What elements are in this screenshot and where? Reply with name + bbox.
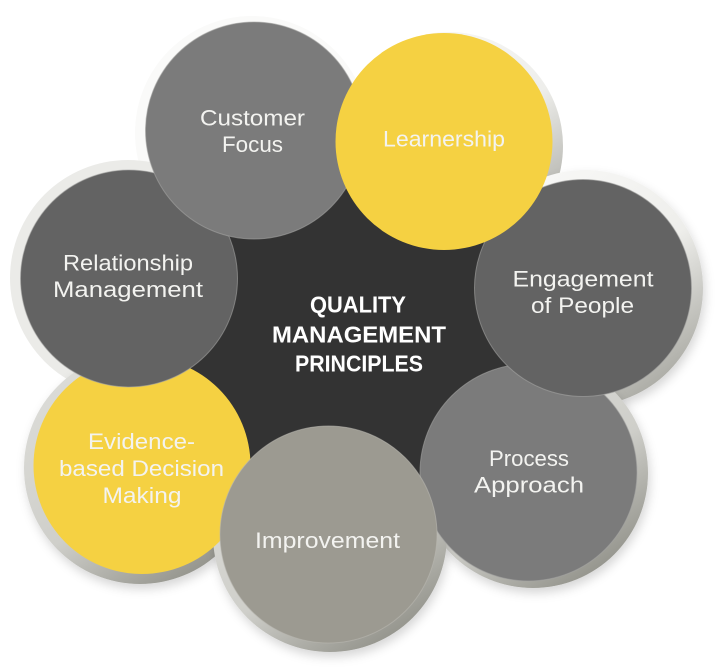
circle: Learnership (336, 33, 552, 250)
circle: Relationship Management (20, 170, 238, 387)
title (272, 292, 447, 376)
circle: Engagement of People (474, 180, 692, 396)
circle: Evidence-based Decision Making: based Decision (59, 456, 224, 481)
central dark panel (170, 165, 530, 520)
circle: Engagement of People: of People (531, 293, 634, 318)
circle: Learnership: Learnership (383, 126, 505, 152)
circle: Evidence-based Decision Making: Evidence- (88, 429, 195, 454)
circle: Customer Focus: Customer (200, 106, 306, 130)
circle: Evidence-based Decision Making: Making (102, 483, 182, 508)
circle: Process Approach: Process (489, 446, 569, 471)
title: MANAGEMENT (272, 322, 447, 348)
circle: Relationship Management: Management (53, 277, 204, 302)
circle: Process Approach: Approach (474, 472, 584, 498)
circle: Improvement: Improvement (255, 528, 401, 553)
circle: Process Approach (420, 364, 637, 581)
circle: Customer Focus: Focus (222, 132, 283, 157)
title: PRINCIPLES (295, 350, 423, 376)
title: QUALITY (310, 292, 406, 318)
circle: Improvement (220, 426, 437, 643)
circle: Evidence-based Decision Making (34, 357, 250, 574)
circle: Relationship Management: Relationship (63, 250, 193, 276)
circle: Customer Focus (146, 22, 362, 239)
circle: Engagement of People: Engagement (512, 266, 654, 292)
